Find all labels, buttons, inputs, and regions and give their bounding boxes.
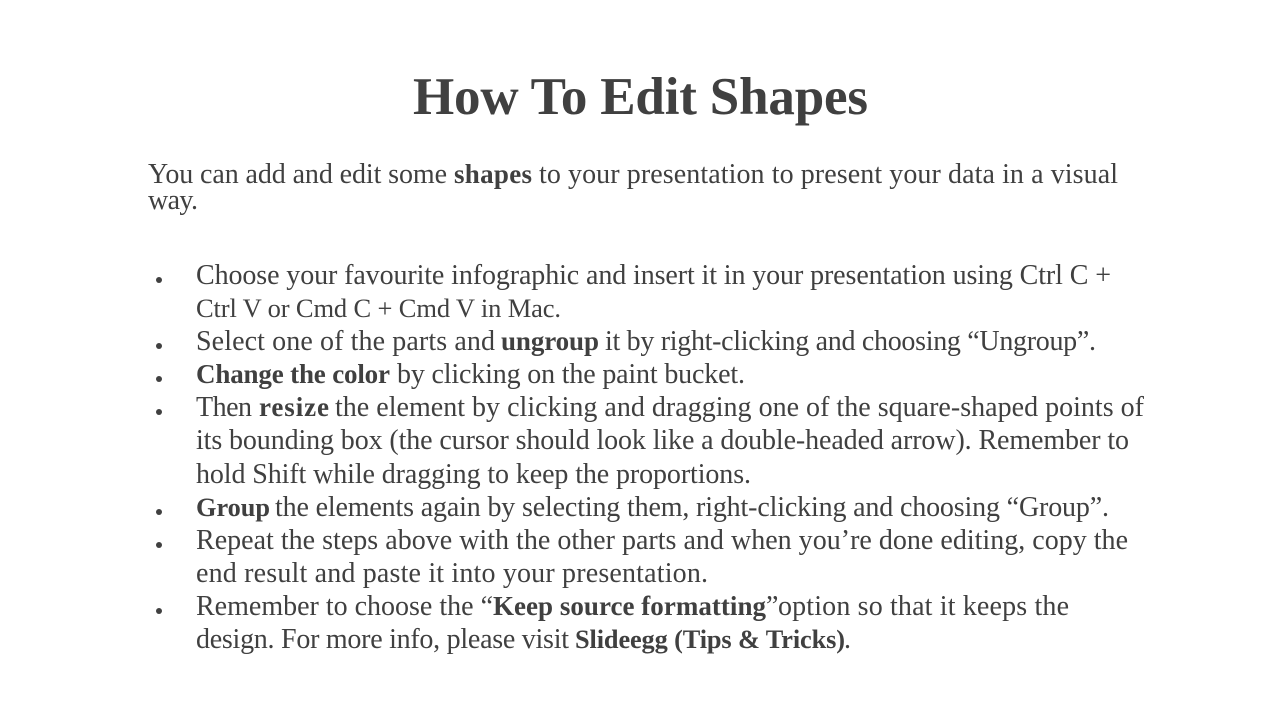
list item: resize: Then bbox=[196, 392, 252, 423]
list item: choose infographic: Ctrl V or Cmd C + Cmd V in Mac. bbox=[196, 293, 561, 323]
list item: repeat bbox=[156, 525, 1128, 589]
list item: keep source formatting: ” bbox=[766, 591, 778, 622]
intro paragraph: way. bbox=[148, 185, 198, 216]
list item: ungroup: it by right-clicking and choosing “Ungroup”. bbox=[605, 326, 1096, 357]
list item: keep source formatting: design. For more info, please visit bbox=[196, 624, 569, 655]
list item: resize: its bounding box (the cursor should look like a double-headed arrow). Remember to bbox=[196, 425, 1129, 456]
list item: change color bbox=[156, 359, 745, 390]
list item: keep source formatting: . bbox=[844, 624, 851, 655]
list item: ungroup: ungroup bbox=[501, 326, 599, 356]
list item: repeat: Repeat the steps above with the other parts and when you’re done editing, copy the bbox=[196, 525, 1128, 556]
list item: group: Group bbox=[196, 493, 270, 522]
list item: keep source formatting: Remember to choose the “ bbox=[196, 591, 493, 622]
list item: keep source formatting bbox=[156, 591, 1069, 655]
title: How To Edit Shapes bbox=[413, 68, 868, 126]
list item: keep source formatting: option so that it keeps the bbox=[778, 591, 1069, 622]
list item: resize: the element by clicking and dragging one of the square-shaped points of bbox=[335, 392, 1145, 423]
list item: group: the elements again by selecting them, right-clicking and choosing “Group”. bbox=[275, 492, 1109, 523]
list item: choose infographic bbox=[156, 260, 1111, 323]
list item: resize: hold Shift while dragging to keep the proportions. bbox=[196, 459, 751, 490]
list item: repeat: end result and paste it into your presentation. bbox=[196, 558, 708, 589]
list item: resize: resize bbox=[259, 392, 329, 422]
intro paragraph: shapes bbox=[454, 159, 532, 189]
list item: ungroup: Select one of the parts and bbox=[196, 326, 495, 357]
intro paragraph: to your presentation to present your data in a visual bbox=[539, 159, 1118, 190]
list item: change color: by clicking on the paint bucket. bbox=[397, 359, 745, 390]
intro paragraph: You can add and edit some bbox=[148, 159, 447, 190]
list item: change color: Change the color bbox=[196, 359, 390, 389]
list item: keep source formatting: Slideegg (Tips & Tricks) bbox=[575, 625, 845, 654]
bullet list bbox=[156, 260, 1145, 655]
list item: ungroup bbox=[156, 326, 1096, 357]
list item: keep source formatting: Keep source formatting bbox=[493, 591, 766, 621]
intro paragraph bbox=[148, 159, 1118, 216]
list item: resize bbox=[156, 392, 1145, 490]
list item: choose infographic: Choose your favourite infographic and insert it in your presentation using Ctrl C + bbox=[196, 260, 1111, 291]
